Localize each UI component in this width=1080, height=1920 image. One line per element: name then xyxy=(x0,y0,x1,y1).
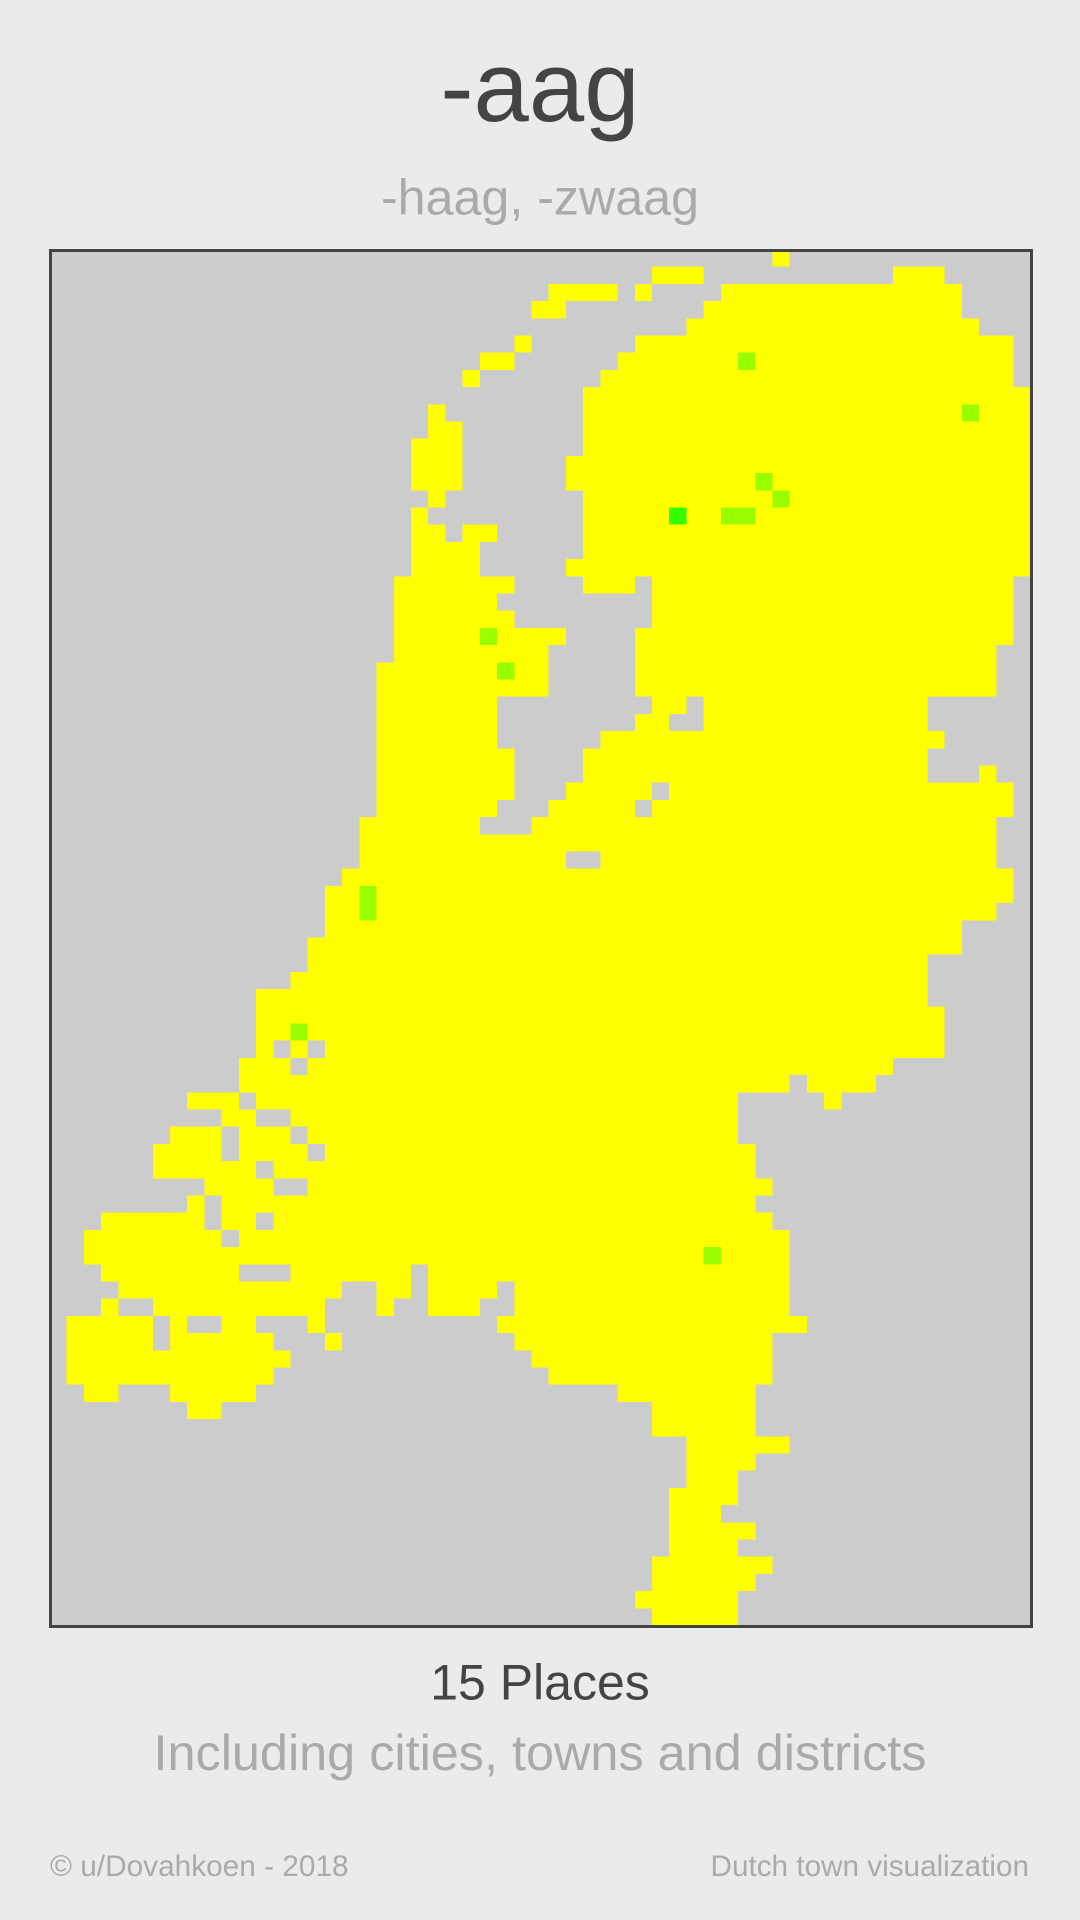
panel: map xyxy=(50,250,1032,1626)
scope note: Including cities, towns and districts xyxy=(153,1724,927,1781)
grid map of the Netherlands xyxy=(67,250,1031,1626)
place count: 15 Places xyxy=(430,1654,650,1710)
subtitle: suffix variants: -haag, -zwaag xyxy=(381,170,699,226)
footer credit: © u/Dovahkoen - 2018 xyxy=(50,1850,349,1883)
place cell: brightest green xyxy=(669,508,686,525)
place cells: green xyxy=(290,353,979,1264)
map frame xyxy=(50,250,1032,1626)
title: -aag xyxy=(440,32,640,143)
land cells: yellow xyxy=(67,250,1031,1626)
map background xyxy=(50,250,1032,1626)
footer project name: Dutch town visualization xyxy=(711,1850,1029,1883)
